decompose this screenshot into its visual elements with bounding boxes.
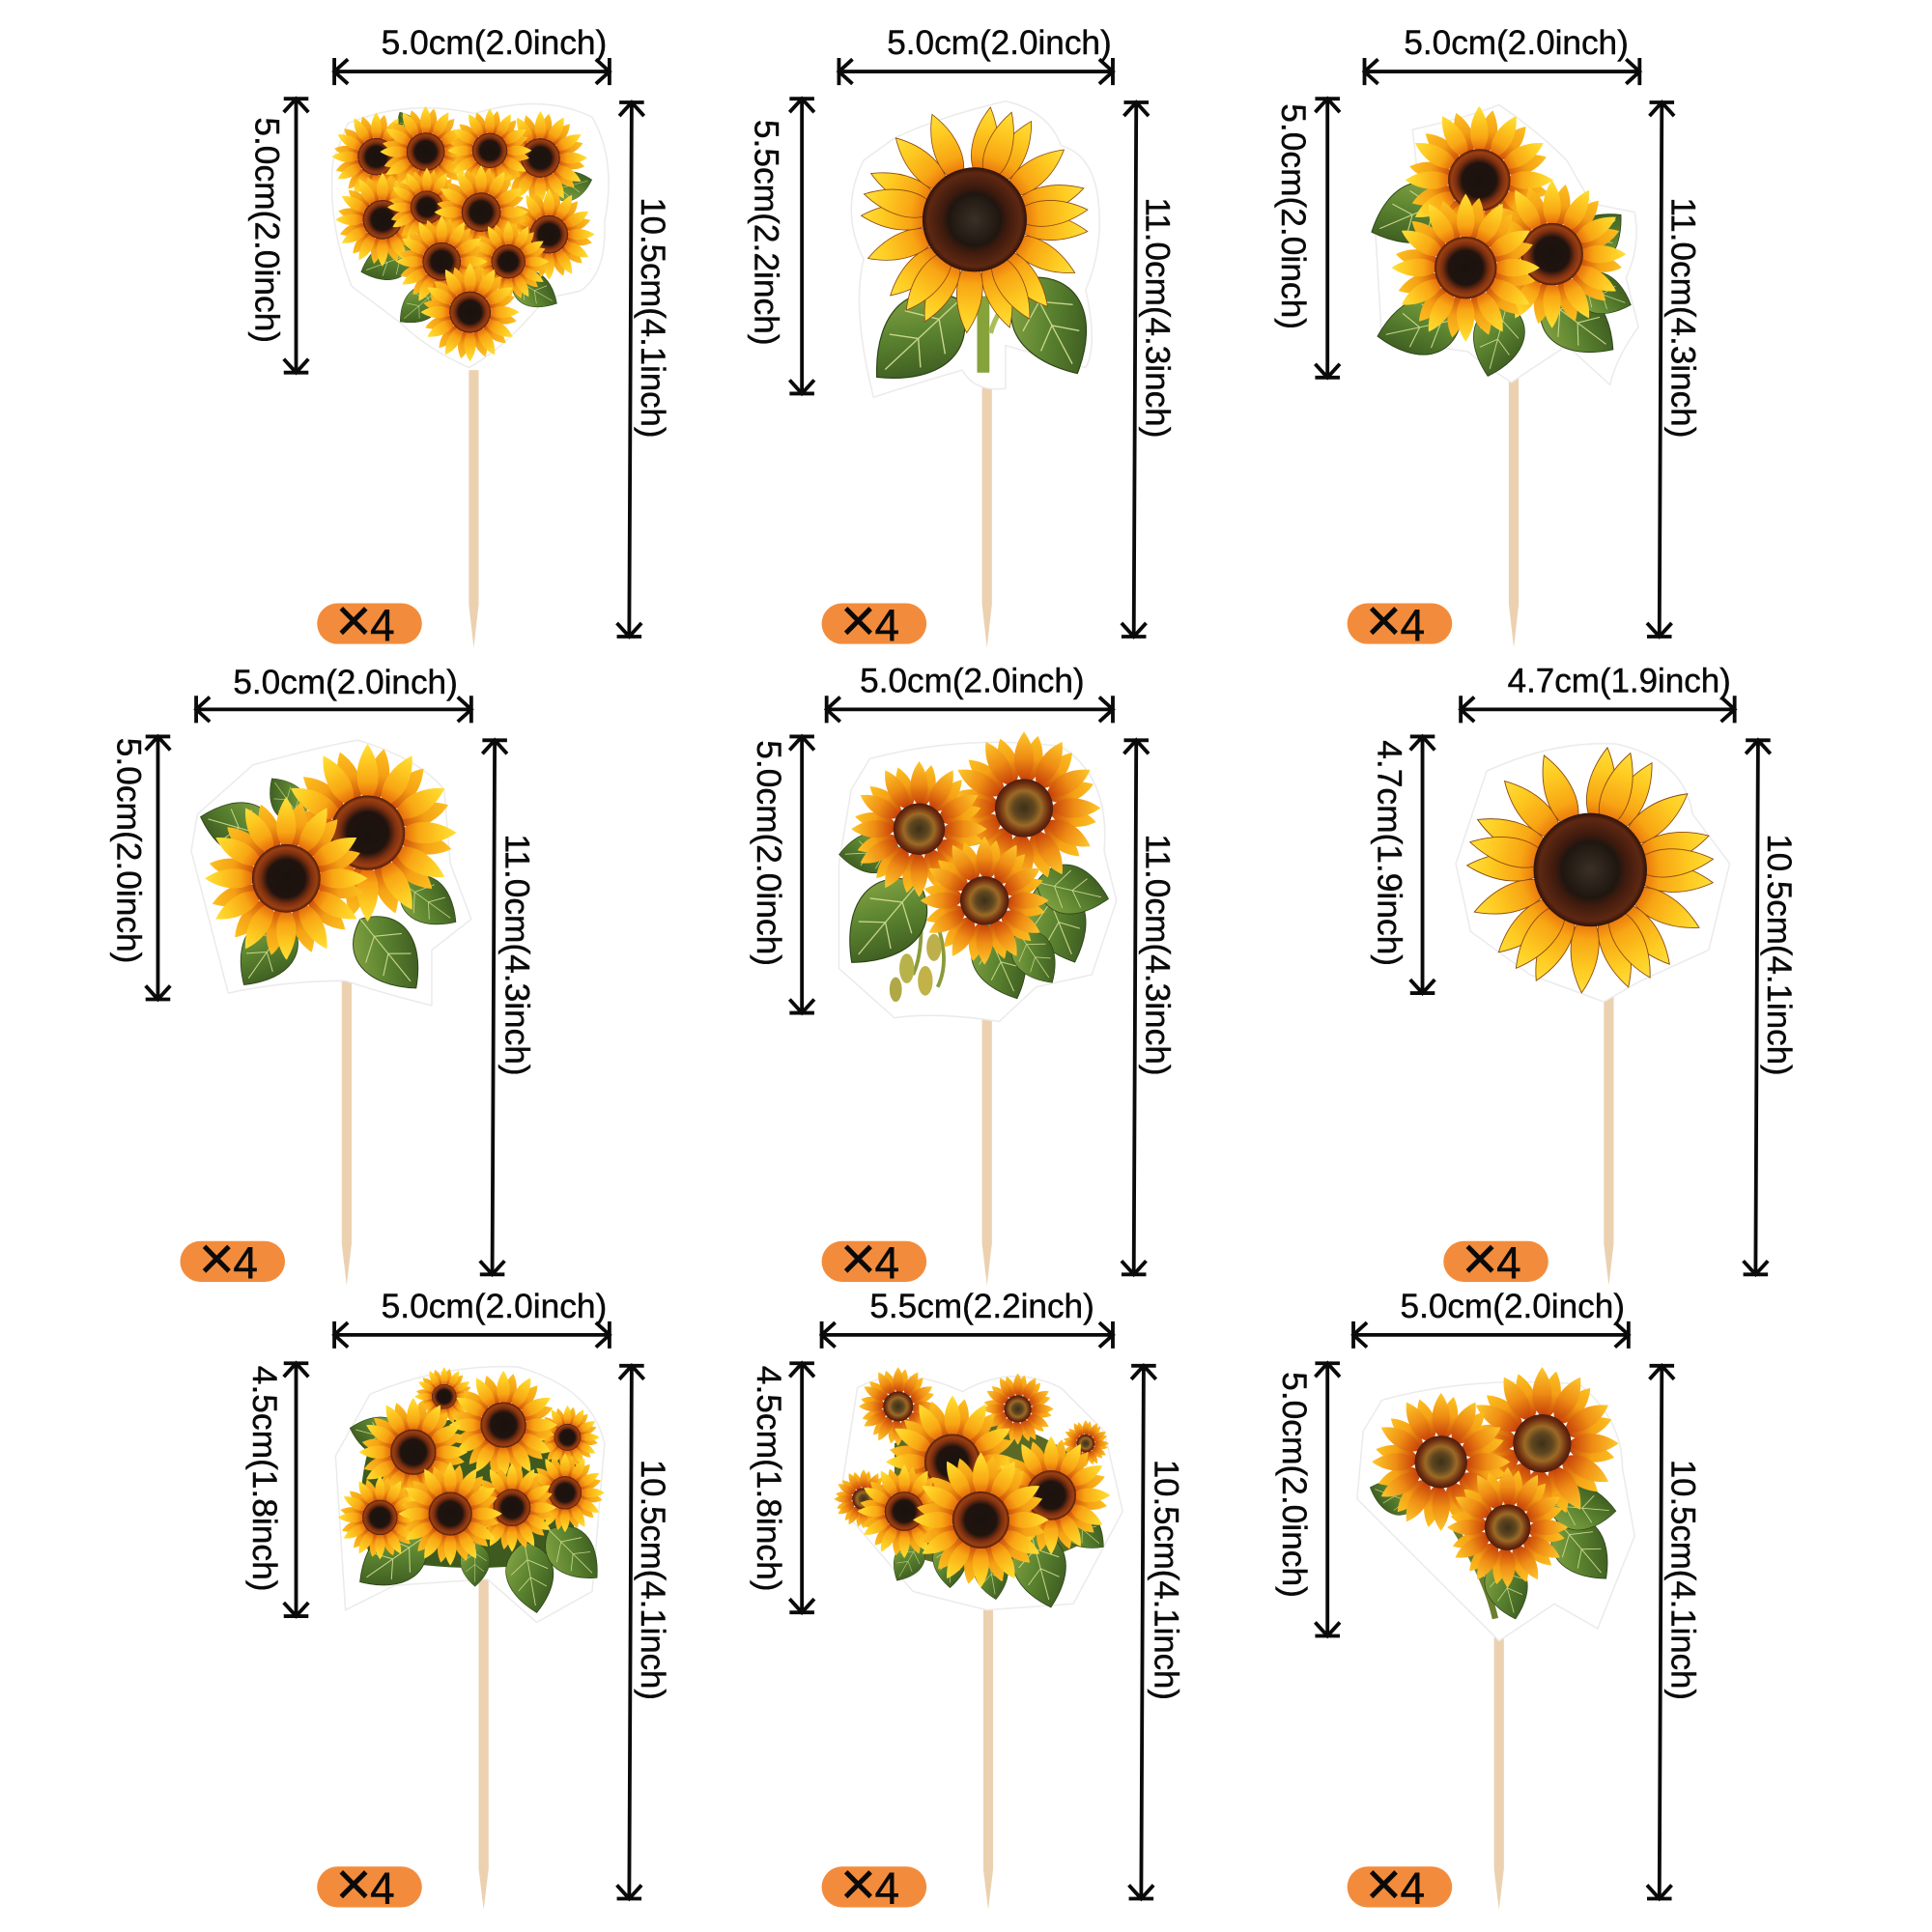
flower height label: 4.5cm(1.8inch) xyxy=(245,1366,283,1592)
quantity badge: 4 xyxy=(1496,1237,1521,1288)
topper 6: single large sunflower xyxy=(1371,662,1798,1293)
leaves xyxy=(355,108,596,334)
width arrow xyxy=(334,1321,610,1349)
width arrow xyxy=(1353,1321,1629,1349)
topper 4: two sunflowers xyxy=(109,664,536,1293)
quantity badge: 4 xyxy=(1401,600,1425,650)
quantity badge xyxy=(1443,1223,1548,1293)
width label: 5.0cm(2.0inch) xyxy=(382,24,607,62)
sunflowers xyxy=(1392,106,1626,342)
wooden stick xyxy=(1494,1629,1504,1910)
leaves xyxy=(884,1422,1116,1614)
topper 3: three sunflowers xyxy=(1274,24,1702,655)
total height arrow xyxy=(1647,102,1674,637)
total height arrow xyxy=(1129,1366,1156,1899)
width arrow xyxy=(196,696,471,723)
flower height arrow xyxy=(146,736,170,999)
quantity badge: 4 xyxy=(370,1863,395,1914)
quantity badge xyxy=(1348,585,1452,655)
width arrow xyxy=(827,696,1113,723)
flower height arrow xyxy=(284,99,308,373)
topper 2: single sunflower xyxy=(748,24,1176,655)
wooden stick xyxy=(469,370,479,647)
flower height label: 5.5cm(2.2inch) xyxy=(748,120,785,346)
width arrow xyxy=(838,58,1113,85)
sticker outline xyxy=(332,104,609,368)
total height arrow xyxy=(617,1366,644,1899)
sticker outline xyxy=(838,1377,1122,1610)
total height arrow xyxy=(1744,740,1771,1274)
wooden stick xyxy=(479,1579,489,1910)
total height arrow xyxy=(480,740,507,1274)
sticker outline xyxy=(838,742,1117,1021)
flower height arrow xyxy=(789,99,814,393)
quantity badge: × xyxy=(1462,1223,1498,1293)
width label: 5.0cm(2.0inch) xyxy=(860,662,1085,699)
width label: 4.7cm(1.9inch) xyxy=(1508,662,1731,699)
flower height label: 4.5cm(1.8inch) xyxy=(750,1366,787,1592)
total height label: 10.5cm(4.1inch) xyxy=(634,197,671,438)
flower height arrow xyxy=(789,736,814,1013)
flower height label: 5.0cm(2.0inch) xyxy=(247,117,285,343)
topper 5: orange bouquet xyxy=(750,662,1176,1293)
flower height label: 5.0cm(2.0inch) xyxy=(109,738,147,963)
total height arrow xyxy=(617,102,644,637)
flower height label: 5.0cm(2.0inch) xyxy=(1274,103,1312,329)
width arrow xyxy=(1461,696,1735,723)
total height label: 11.0cm(4.3inch) xyxy=(498,834,536,1076)
total height label: 11.0cm(4.3inch) xyxy=(1664,197,1702,438)
quantity badge: 4 xyxy=(874,600,899,650)
sunflower xyxy=(1466,746,1715,994)
flower height arrow xyxy=(789,1363,814,1612)
width label: 5.5cm(2.2inch) xyxy=(869,1288,1094,1325)
total height label: 11.0cm(4.3inch) xyxy=(1138,834,1176,1076)
quantity badge: × xyxy=(199,1223,235,1293)
flower height arrow xyxy=(1315,1363,1340,1635)
quantity badge: × xyxy=(1366,585,1402,655)
sunflowers xyxy=(1372,1367,1619,1588)
width arrow xyxy=(822,1321,1113,1349)
quantity badge: 4 xyxy=(1401,1863,1425,1914)
width label: 5.0cm(2.0inch) xyxy=(1401,1288,1625,1325)
wooden stick xyxy=(982,384,992,647)
quantity badge xyxy=(317,585,422,655)
flower height label: 5.0cm(2.0inch) xyxy=(1275,1372,1313,1598)
quantity badge xyxy=(822,1849,926,1918)
quantity badge xyxy=(180,1223,285,1293)
sunflowers xyxy=(338,1367,605,1566)
width arrow xyxy=(334,58,610,85)
flower height arrow xyxy=(284,1363,308,1616)
quantity badge: × xyxy=(840,585,876,655)
leaves xyxy=(193,768,469,1007)
sticker outline xyxy=(1456,744,1730,1002)
leaves and buds xyxy=(825,831,1114,1009)
flower height arrow xyxy=(1315,99,1340,378)
total height label: 10.5cm(4.1inch) xyxy=(1147,1460,1184,1700)
quantity badge: × xyxy=(335,585,372,655)
flower height label: 4.7cm(1.9inch) xyxy=(1371,740,1408,966)
width label: 5.0cm(2.0inch) xyxy=(887,24,1112,62)
quantity badge xyxy=(822,585,926,655)
flower height arrow xyxy=(1410,736,1435,993)
total height label: 10.5cm(4.1inch) xyxy=(1760,834,1798,1076)
quantity badge: × xyxy=(1366,1849,1402,1918)
total height label: 11.0cm(4.3inch) xyxy=(1138,197,1176,438)
sunflowers xyxy=(332,106,595,361)
flower height label: 5.0cm(2.0inch) xyxy=(750,740,787,966)
total height arrow xyxy=(1122,740,1149,1274)
total height label: 10.5cm(4.1inch) xyxy=(1664,1460,1702,1700)
wooden stick xyxy=(1604,993,1613,1286)
quantity badge: × xyxy=(840,1849,876,1918)
sunflowers xyxy=(834,1367,1110,1588)
sticker outline xyxy=(191,740,471,1006)
topper 8: wide sunflower bunch xyxy=(750,1288,1184,1918)
leaves and stem xyxy=(851,261,1109,405)
topper 9: orange sunflower spray xyxy=(1275,1288,1702,1918)
sticker outline xyxy=(335,1367,605,1622)
leaves xyxy=(345,1409,612,1617)
quantity badge xyxy=(822,1223,926,1293)
quantity badge: × xyxy=(840,1223,876,1293)
sunflowers xyxy=(205,744,457,960)
sticker outline xyxy=(851,101,1099,397)
leaves and stem xyxy=(1364,1471,1626,1625)
sticker outline xyxy=(1376,105,1638,384)
wooden stick xyxy=(342,980,352,1286)
sunflowers xyxy=(851,731,1100,965)
quantity badge xyxy=(1348,1849,1452,1918)
topper 1: heart sunflowers xyxy=(247,24,671,655)
quantity badge: × xyxy=(335,1849,372,1918)
wooden stick xyxy=(1509,357,1519,647)
total height label: 10.5cm(4.1inch) xyxy=(634,1460,671,1700)
total height arrow xyxy=(1647,1366,1674,1899)
leaves xyxy=(1360,170,1638,383)
quantity badge: 4 xyxy=(874,1237,899,1288)
topper 7: sunflower bunch xyxy=(245,1288,671,1918)
wooden stick xyxy=(982,1011,992,1286)
quantity badge: 4 xyxy=(874,1863,899,1914)
width label: 5.0cm(2.0inch) xyxy=(382,1288,607,1325)
sunflower xyxy=(861,105,1089,333)
width label: 5.0cm(2.0inch) xyxy=(1404,24,1629,62)
width arrow xyxy=(1365,58,1639,85)
quantity badge: 4 xyxy=(233,1237,258,1288)
total height arrow xyxy=(1122,102,1149,637)
wooden stick xyxy=(983,1604,993,1910)
width label: 5.0cm(2.0inch) xyxy=(233,664,458,701)
quantity badge xyxy=(317,1849,422,1918)
sticker outline xyxy=(1357,1382,1634,1641)
quantity badge: 4 xyxy=(370,600,395,650)
